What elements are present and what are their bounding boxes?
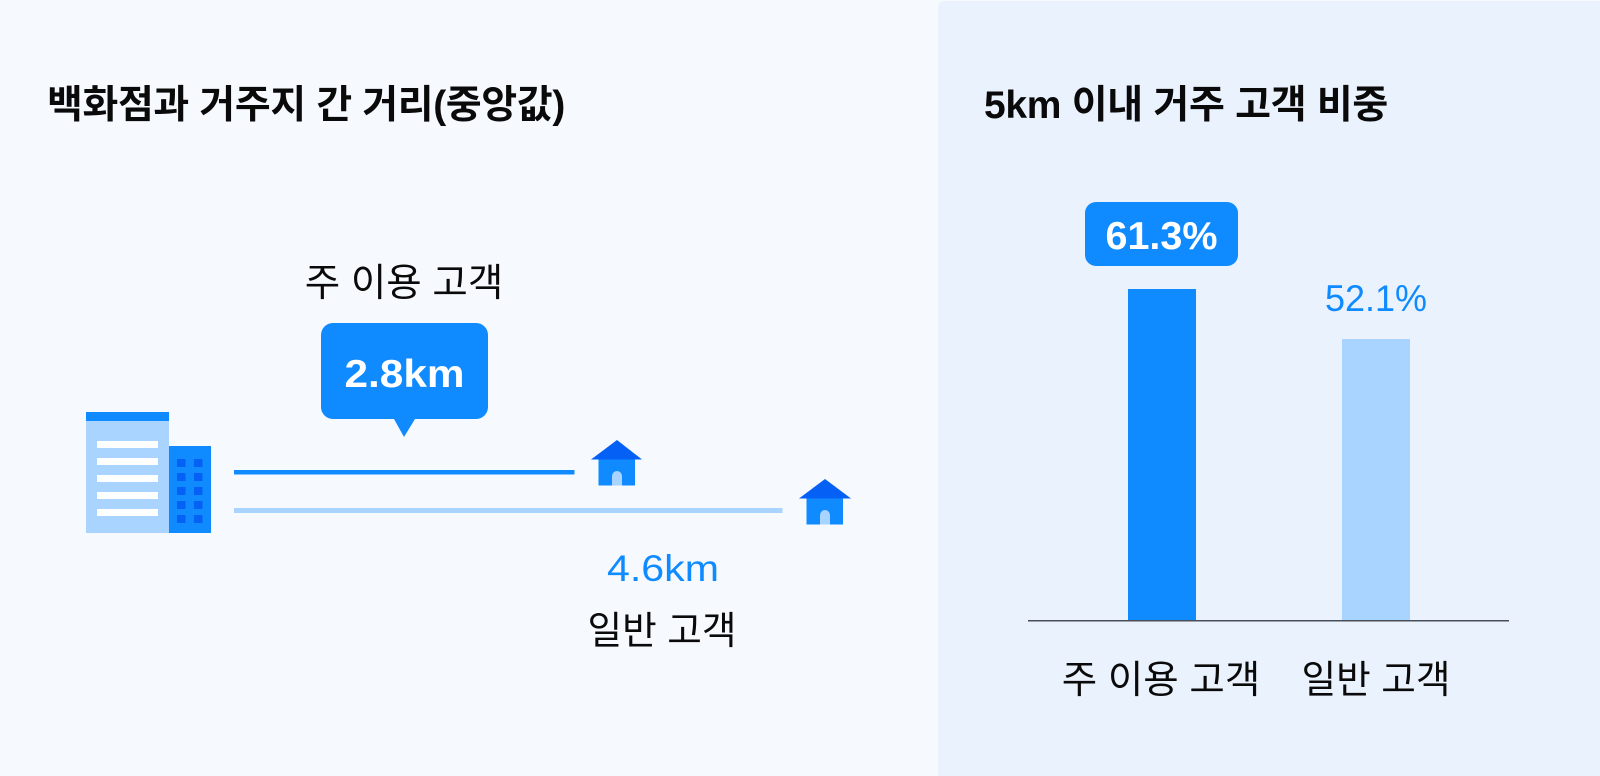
icon: department store building	[86, 412, 211, 533]
heading: distance: 백화점과 거주지 간 거리(중앙값)	[47, 84, 565, 127]
axis baseline	[1028, 620, 1509, 622]
callout: 2.8km: 2.8km	[344, 353, 464, 396]
heading: within 5km share: 5km 이내 거주 고객 비중	[984, 84, 1388, 127]
icon: house far	[799, 479, 851, 524]
callout: 61.3%: 61.3%	[1106, 215, 1218, 258]
bar: main customers	[1128, 289, 1196, 621]
callout: 2.8km	[321, 323, 488, 437]
label: general customers: 일반 고객	[588, 610, 736, 653]
value: 4.6km: 4.6km	[607, 548, 719, 589]
label: main customers: 주 이용 고객	[305, 262, 503, 305]
line: main customer distance	[234, 470, 574, 474]
axis label: main customers: 주 이용 고객	[1062, 659, 1260, 702]
panel: right background	[938, 1, 1600, 776]
callout: 61.3%	[1085, 202, 1238, 266]
bar: general customers	[1342, 339, 1410, 621]
bar chart: share within 5km	[1028, 202, 1509, 702]
axis label: general customers: 일반 고객	[1302, 659, 1450, 702]
line: general customer distance	[234, 508, 782, 513]
value: 52.1%: 52.1%	[1325, 278, 1427, 319]
icon: house near	[591, 440, 642, 486]
